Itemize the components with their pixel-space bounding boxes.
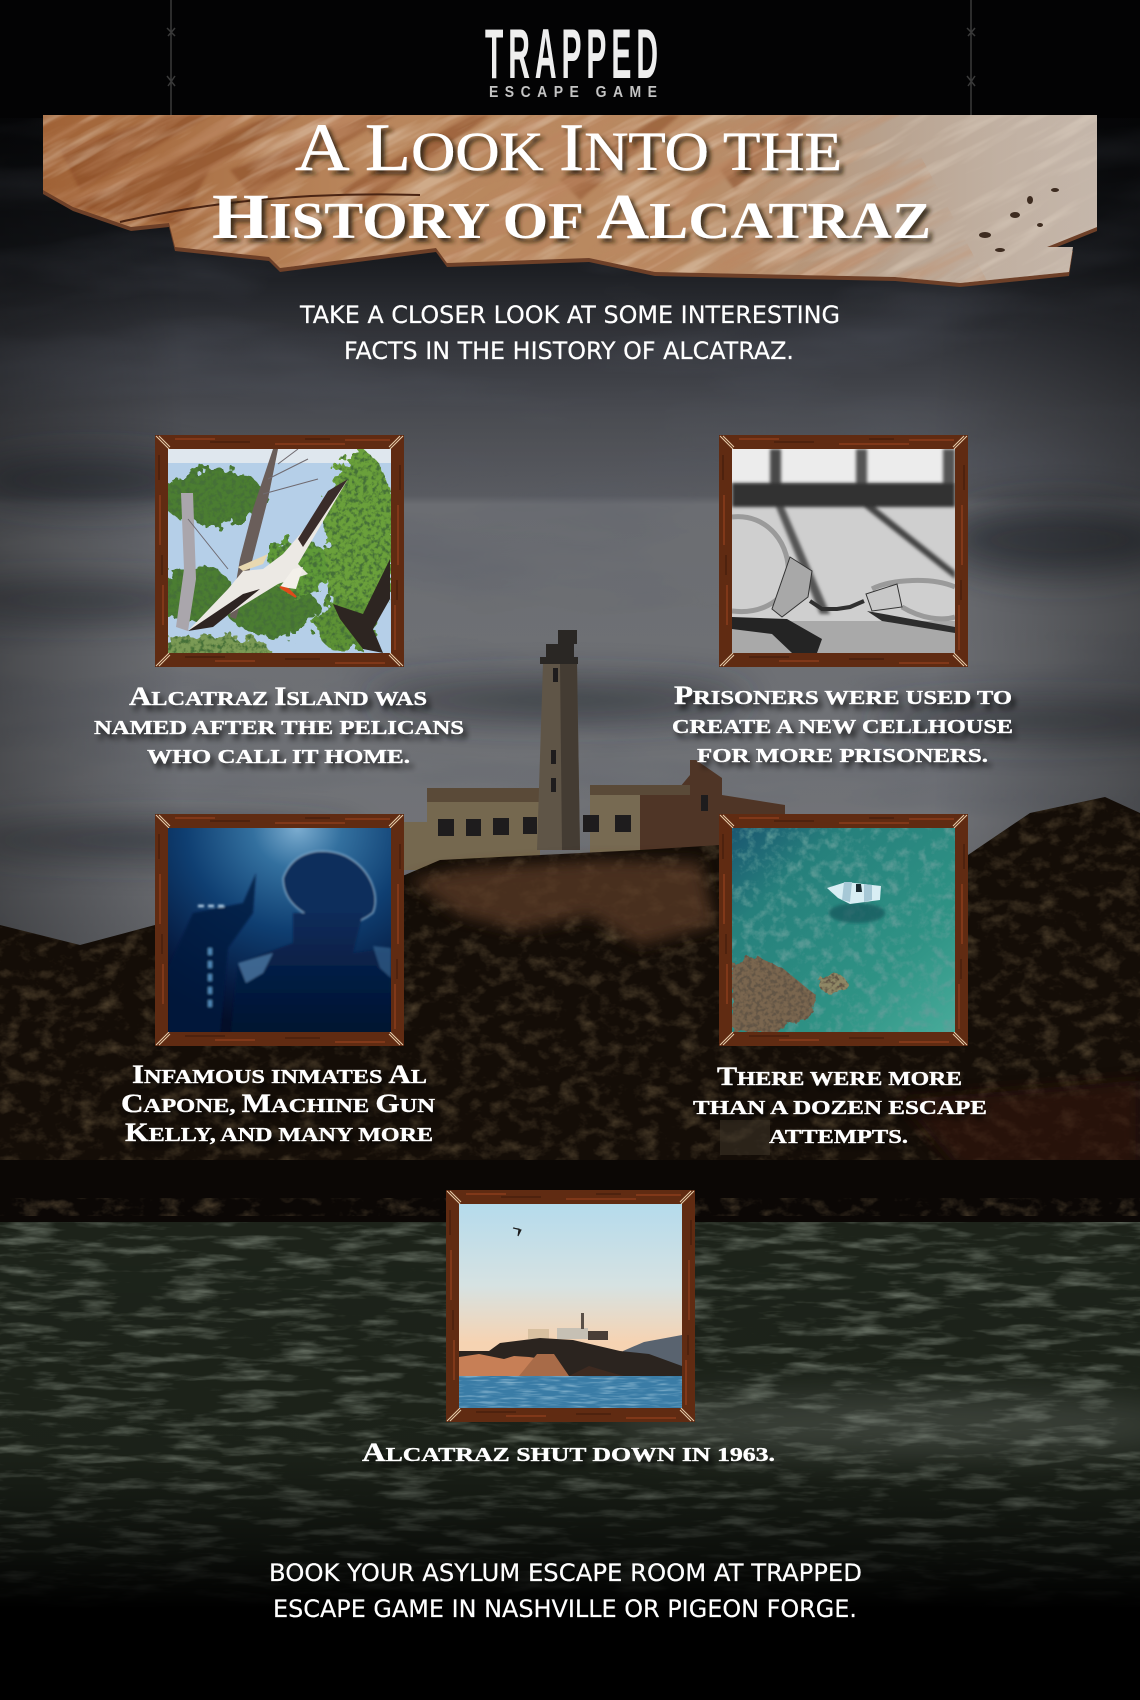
caption: [94, 682, 464, 768]
logo: TRAPPED: [485, 14, 658, 94]
photo: pelican: [168, 449, 391, 653]
panel: handcuffs: [672, 435, 1013, 767]
cellhouse and lighthouse: [403, 630, 785, 870]
caption: ALCATRAZ SHUT DOWN IN 1963.: [362, 1438, 775, 1467]
top black band: [0, 0, 1140, 118]
panel: escape attempts: [693, 814, 987, 1148]
panel: inmates: [121, 814, 435, 1147]
caption: NAMED AFTER THE PELICANS: [94, 717, 464, 739]
caption: [121, 1060, 435, 1147]
frame: [155, 435, 404, 667]
title: A LOOK INTO THE: [295, 109, 842, 185]
call to action: ESCAPE GAME IN NASHVILLE OR PIGEON FORGE.: [273, 1595, 857, 1623]
intro text: [299, 301, 840, 365]
island: [0, 797, 1140, 1180]
caption: ALCATRAZ ISLAND WAS: [129, 682, 427, 711]
shoreline: [0, 1160, 1140, 1224]
caption: PRISONERS WERE USED TO: [674, 681, 1012, 710]
photo: handcuffs: [732, 449, 955, 653]
caption: [672, 681, 1013, 767]
caption: INFAMOUS INMATES AL: [132, 1060, 427, 1089]
caption: WHO CALL IT HOME.: [147, 746, 410, 768]
water: [0, 1222, 1140, 1700]
frame: [719, 814, 968, 1046]
caption: CAPONE, MACHINE GUN: [121, 1089, 435, 1118]
caption: ATTEMPTS.: [769, 1126, 908, 1148]
wooden sign: [43, 115, 1097, 287]
call to action: [269, 1559, 862, 1623]
intro text: FACTS IN THE HISTORY OF ALCATRAZ.: [344, 337, 794, 365]
call to action: BOOK YOUR ASYLUM ESCAPE ROOM AT TRAPPED: [269, 1559, 862, 1587]
barbed wires: [167, 0, 975, 115]
sky: [0, 0, 1140, 1000]
frame: [155, 814, 404, 1046]
logo: ESCAPE GAME: [489, 83, 657, 101]
frame: [446, 1190, 695, 1422]
pelican: [188, 479, 348, 631]
frame: [719, 435, 968, 667]
panel: shut down: [362, 1190, 775, 1467]
panel: pelicans: [94, 435, 464, 768]
intro text: TAKE A CLOSER LOOK AT SOME INTERESTING: [299, 301, 840, 329]
caption: [693, 1062, 987, 1148]
photo: boat on water: [732, 828, 955, 1032]
photo: alcatraz at dusk: [459, 1204, 682, 1408]
caption: THAN A DOZEN ESCAPE: [693, 1097, 987, 1119]
caption: CREATE A NEW CELLHOUSE: [672, 716, 1013, 738]
caption: FOR MORE PRISONERS.: [697, 745, 988, 767]
title: [212, 109, 931, 253]
photo: silhouette: [168, 828, 391, 1032]
caption: KELLY, AND MANY MORE: [125, 1118, 433, 1147]
caption: THERE WERE MORE: [717, 1062, 962, 1091]
title: HISTORY OF ALCATRAZ: [212, 181, 931, 253]
